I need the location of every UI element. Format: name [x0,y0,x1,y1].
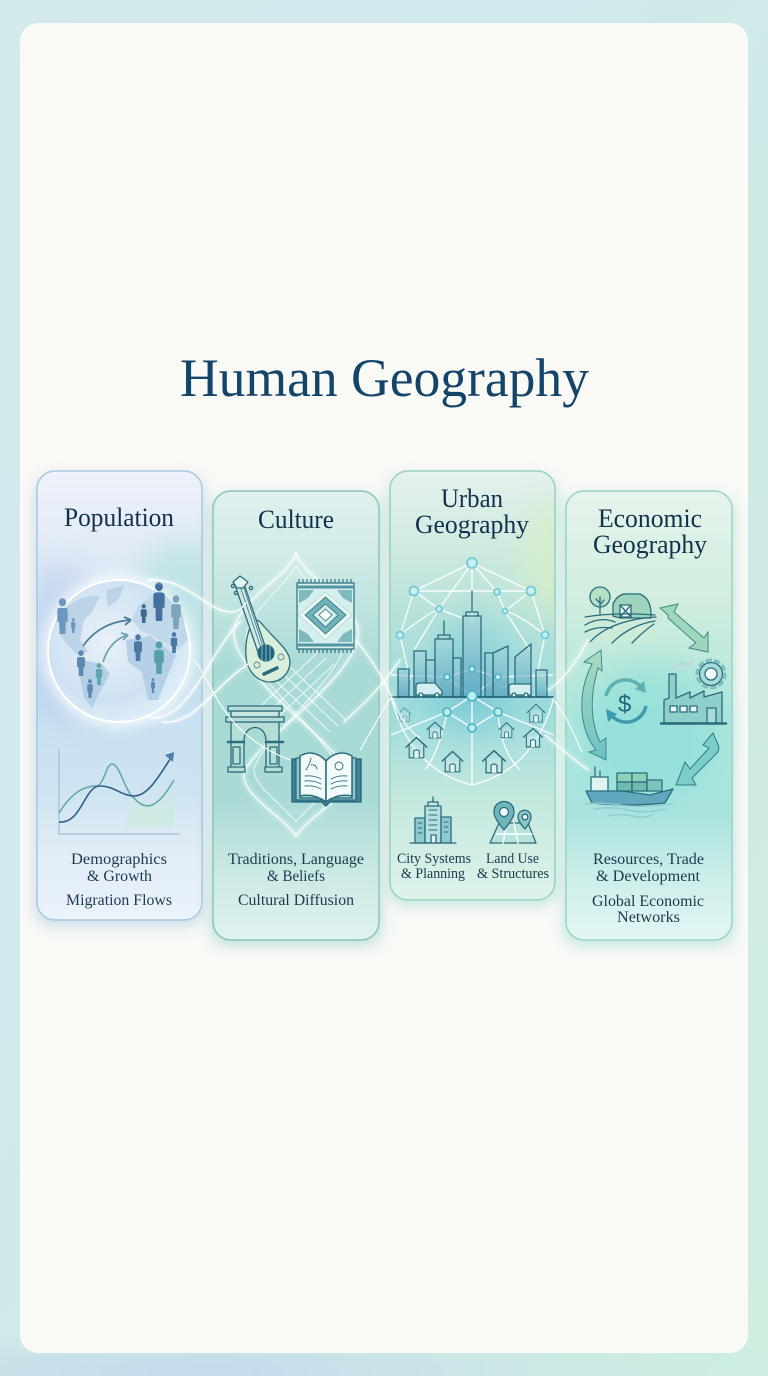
panel: culture [209,491,383,947]
neighbourhood houses [398,704,545,773]
icon: oud instrument [231,576,290,682]
arrow: ship to farm loop [582,650,606,760]
network diagram [391,558,554,785]
panel: population [28,470,210,932]
heading: culture: Culture [258,505,334,534]
label: global economic networks [592,893,704,926]
heading: urban geography: Geography [415,510,529,539]
decorative ogee knot [234,553,358,836]
skyline with vehicles [391,591,553,697]
heading: economic geography: Geography [593,530,707,559]
title: Human Geography [180,348,589,408]
heading: urban geography: Urban [441,484,503,513]
heading: economic geography [593,504,707,559]
label: city systems and planning: & Planning [401,866,465,882]
label: global economic networks: Networks [617,909,680,926]
icon: farm with barn and fields [585,587,658,643]
hub nodes on the lower network [443,666,502,732]
panel: urban geography [386,471,590,907]
label: resources, trade and development: Resources, Trade [593,851,704,868]
label: traditions, language and beliefs: & Beliefs [267,868,325,885]
label: resources, trade and development: & Development [596,868,701,885]
label: global economic networks: Global Economic [592,893,704,910]
icon: factory and gear [661,660,726,724]
panel: economic geography [562,491,736,947]
label: demographics and growth [71,851,167,885]
label: cultural diffusion: Cultural Diffusion [238,892,354,909]
label: land use and structures: & Structures [477,866,549,882]
label: city systems and planning [397,851,471,882]
centre glow [582,660,718,800]
heading: economic geography: Economic [598,504,702,533]
label: migration flows: Migration Flows [66,892,172,909]
arrow: factory to ship [676,733,719,785]
icon: container ship [585,767,673,817]
icon: globe with people [42,574,196,728]
icon: open book [292,753,361,806]
label: city systems and planning: City Systems [397,851,471,867]
icon: dollar cycle [606,680,646,722]
label: demographics and growth: & Growth [87,868,152,885]
arrow: farm to factory [660,604,708,652]
label: resources, trade and development [593,851,704,885]
bottom background strip [0,1352,768,1376]
icon: city systems [410,797,456,843]
icon: woven rug [297,579,354,653]
label: demographics and growth: Demographics [71,851,167,868]
line chart: growth [59,750,180,834]
heading: population: Population [64,503,174,532]
icon: land use map pins [490,802,536,843]
city glow [400,595,544,765]
icon: triumphal arch [226,706,284,772]
label: traditions, language and beliefs: Traditions, Language [228,851,364,868]
flow lines linking the panels [148,580,588,770]
label: traditions, language and beliefs [228,851,364,885]
label: land use and structures [477,851,549,882]
heading: urban geography [415,484,529,539]
label: land use and structures: Land Use [486,851,539,867]
icon: dollar cycle: $ [618,691,631,718]
